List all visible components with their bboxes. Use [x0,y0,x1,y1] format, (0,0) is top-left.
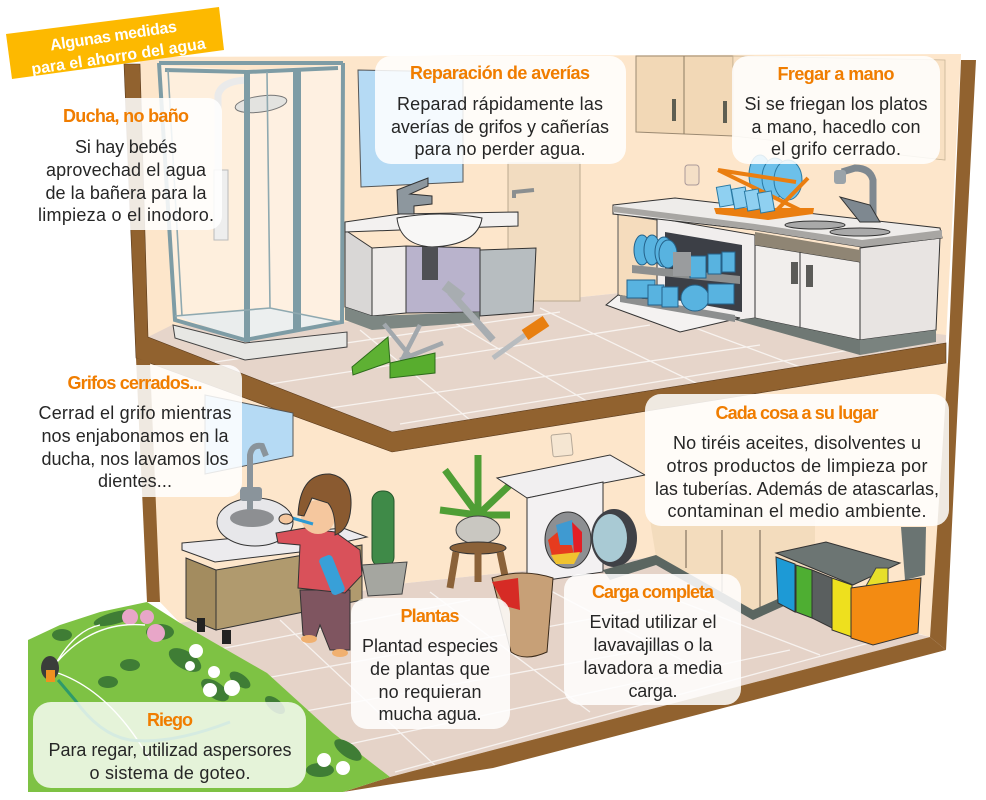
drying rack [714,155,814,220]
text block: Reparad rápidamente las [397,94,603,114]
dishwasher [606,218,755,332]
tools [352,285,546,378]
lower tap [250,446,266,510]
text block [655,433,939,521]
lower room walls [150,362,948,637]
white flowers [185,644,350,775]
brown lower left wall [136,358,160,602]
heading: Plantas [400,606,460,626]
lawn [28,602,390,792]
text block: para no perder agua. [414,139,586,159]
text block: lavavajillas o la [594,635,713,655]
brown lower slab [343,637,946,792]
panel: fregar a mano [732,56,940,164]
sink basin [397,214,482,247]
wrench [450,292,493,340]
banner: title: para el ahorro del agua [30,36,207,78]
shower head [234,92,288,116]
screwdriver [493,335,525,358]
sweater [276,528,362,593]
heading: Fregar a mano [778,64,894,84]
text block [38,137,214,225]
shower glass [160,65,245,340]
text block: Si se friegan los platos [744,94,928,114]
text block: de plantas que [370,659,490,679]
panel: grifos cerrados [28,365,242,497]
tap [397,178,432,214]
laundry cupboards and baseboard [603,518,815,620]
text block: ducha, nos lavamos los [42,449,228,469]
tools in box [384,324,443,360]
brown upper wall and slab [124,64,946,452]
open cabinet door [480,248,536,316]
laundry basket [492,573,553,657]
banner: title [6,7,224,79]
shower base [173,325,347,360]
text block: o sistema de goteo. [90,763,250,783]
text block: Si hay bebés [75,137,177,157]
text block: el grifo cerrado. [771,139,901,159]
cactus in pot [362,491,407,596]
text block [38,403,232,491]
washbasin [217,498,293,546]
child brushing teeth [276,474,362,657]
shower [159,63,347,360]
text block: lavadora a media [584,658,723,678]
text block: aprovechad el agua [46,160,207,180]
text block: Para regar, utilizad aspersores [48,740,292,760]
face [301,500,335,534]
text block: no requieran [378,682,482,702]
upper room walls [140,54,961,340]
text block: Plantad especies [362,636,498,656]
text block: limpieza o el inodoro. [38,205,214,225]
upper cabinets [636,56,945,185]
text block: a mano, hacedlo con [752,117,920,137]
heading: Reparación de averías [410,63,590,83]
toothbrush [292,518,313,524]
text block: Evitad utilizar el [590,612,716,632]
bathroom vanity [345,178,536,330]
text block: Cerrad el grifo mientras [38,403,232,423]
garden with sprinkler [28,602,390,792]
text block [362,636,498,724]
lower sink and vanity [182,446,367,644]
kitchen run [606,155,942,355]
text block: mucha agua. [378,704,482,724]
text block: dientes... [98,471,172,491]
foliage [52,607,365,777]
text block [584,612,723,701]
text block: de la bañera para la [46,183,207,203]
bathroom mirror [358,70,463,187]
banner: title: Algunas medidas [49,19,178,54]
toolbox [352,337,390,375]
pink flowers [122,609,165,642]
text block [744,94,928,159]
heading: Grifos cerrados... [68,373,202,393]
hair [298,474,351,535]
drain pipe [422,247,438,280]
brown right wall [930,60,976,650]
text block: las tuberías. Además de atascarlas, [655,479,939,499]
panel: riego [33,702,306,788]
pants [300,590,350,650]
text block: otros productos de limpieza por [666,456,928,476]
text block: contaminan el medio ambiente. [668,501,926,521]
panel: plantas [351,598,510,729]
text block [391,94,609,159]
sink cabinet [755,245,860,340]
recycling bins [776,527,926,645]
shower frame [159,63,343,340]
heading: Cada cosa a su lugar [716,403,878,423]
panel: carga completa [564,574,741,705]
lower bathroom window [205,395,293,474]
door [508,163,580,301]
heading: Riego [147,710,193,730]
text block: nos enjabonamos en la [42,426,229,446]
panel: cada cosa a su lugar [645,394,949,526]
sprinkler and hose [52,625,150,760]
upper floor [148,293,946,432]
potted plant on stool [440,455,515,590]
washer door [591,509,637,567]
text block: averías de grifos y cañerías [391,117,609,137]
heading: Carga completa [592,582,715,602]
blue dishes [627,235,735,311]
water bottle [318,554,346,596]
kitchen tap [842,168,873,222]
text block [48,740,292,783]
feet [301,635,317,643]
text block: carga. [628,681,678,701]
washing machine [497,455,645,583]
heading: Ducha, no baño [63,106,189,126]
wall socket [551,433,573,457]
lower floor [180,557,930,777]
panel: reparación de averías [375,56,626,164]
worktop [613,198,942,247]
house cutaway structure [124,54,976,792]
text block: No tiréis aceites, disolventes u [673,433,921,453]
panel: ducha, no baño [28,98,222,230]
